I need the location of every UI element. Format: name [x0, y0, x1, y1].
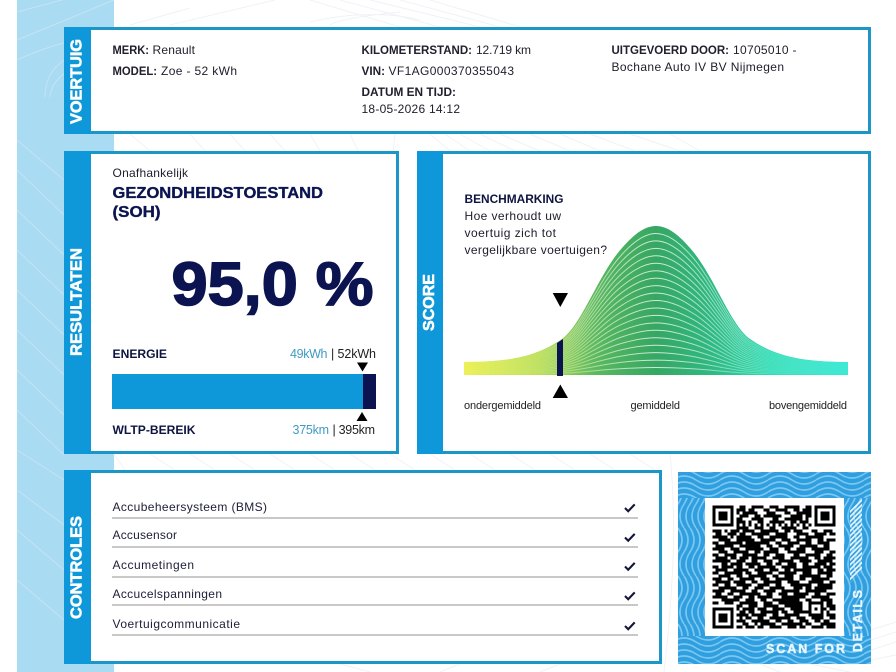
- text: benchmarking question: [464, 209, 607, 257]
- check row: voertuigcommunicatie: [112, 617, 638, 636]
- check row: accucelspanningen: Accucelspanningen: [112, 587, 222, 601]
- text: datum en tijd: DATUM EN TIJD:: [362, 87, 456, 99]
- qr code: [712, 506, 836, 628]
- check row: accusensor: [112, 528, 638, 548]
- text: benchmarking question: vergelijkbare voertuigen?: [464, 243, 607, 257]
- text: kilometerstand: [362, 43, 531, 57]
- values: energie: 49kWh: [290, 347, 328, 361]
- axis label: gemiddeld: gemiddeld: [630, 400, 680, 412]
- values: wltp-bereik: [292, 423, 375, 437]
- band label: resultaten: RESULTATEN: [68, 248, 85, 356]
- score value: 95,0 %: 95,0 %: [172, 250, 374, 318]
- band label: controles: CONTROLES: [68, 516, 85, 619]
- check row: accumetingen: [112, 558, 638, 578]
- heading: gezondheidstoestand: (SOH): [112, 204, 160, 221]
- text: benchmarking question: Hoe verhoudt uw: [464, 209, 561, 223]
- check row: accucelspanningen: [112, 587, 638, 606]
- text: kilometerstand: KILOMETERSTAND:: [362, 45, 472, 57]
- panel: controles: [64, 470, 660, 664]
- text: scan for: SCAN FOR: [766, 642, 845, 656]
- values: energie: | 52kWh: [331, 347, 376, 361]
- panel: qr code: [678, 472, 871, 664]
- decorative hatch strip: [850, 498, 862, 583]
- heading: benchmarking: BENCHMARKING: [464, 192, 564, 206]
- text: merk: MERK:: [112, 45, 149, 57]
- check row: accumetingen: Accumetingen: [112, 558, 194, 572]
- icon: marker down: [357, 362, 368, 372]
- text: datum en tijd: 18-05-2026 14:12: [362, 102, 460, 116]
- icon: marker up: [553, 384, 568, 398]
- text: uitgevoerd door: [612, 43, 796, 74]
- axis label: bovengemiddeld: bovengemiddeld: [769, 400, 847, 412]
- text: benchmarking question: voertuig zich tot: [464, 226, 557, 240]
- text: model: [112, 64, 237, 78]
- heading: gezondheidstoestand: [112, 185, 323, 221]
- vehicle position marker: [557, 339, 563, 376]
- check row: voertuigcommunicatie: Voertuigcommunicatie: [112, 617, 240, 631]
- text: model: Zoe - 52 kWh: [161, 64, 237, 78]
- capacity bar: [112, 374, 376, 409]
- chart: bell curve: [464, 226, 848, 375]
- panel: score: [417, 151, 870, 454]
- text: model: MODEL:: [112, 66, 157, 78]
- icon: marker down: [553, 293, 568, 307]
- text: details: DETAILS: [851, 590, 865, 652]
- band: controles: [64, 470, 91, 664]
- values: wltp-bereik: 375km: [292, 423, 329, 437]
- text: uitgevoerd door: 10705010 -: [733, 43, 796, 57]
- check row: accusensor: Accusensor: [112, 528, 177, 542]
- text: datum en tijd: [362, 87, 460, 116]
- axis label: ondergemiddeld: ondergemiddeld: [464, 400, 541, 412]
- label: energie: ENERGIE: [112, 347, 167, 361]
- text: kilometerstand: 12.719 km: [476, 43, 531, 57]
- band label: score: SCORE: [421, 274, 438, 331]
- check row: accubeheersysteem: Accubeheersysteem (BMS): [112, 500, 267, 514]
- band: resultaten: [64, 151, 91, 454]
- band: score: [417, 151, 443, 454]
- values: energie: [290, 347, 376, 361]
- background: pale blue strip: [17, 0, 114, 672]
- text: onafhankelijk: Onafhankelijk: [112, 166, 189, 180]
- check row: accubeheersysteem: [112, 500, 638, 519]
- label: wltp-bereik: WLTP-BEREIK: [112, 423, 196, 437]
- text: vin: VF1AG000370355043: [388, 64, 514, 78]
- text: uitgevoerd door: UITGEVOERD DOOR:: [612, 45, 729, 57]
- band label: voertuig: VOERTUIG: [68, 39, 85, 124]
- values: wltp-bereik: | 395km: [332, 423, 375, 437]
- text: vin: VIN:: [362, 66, 385, 78]
- panel: resultaten: [64, 151, 398, 454]
- text: merk: [112, 43, 196, 57]
- text: merk: Renault: [152, 43, 196, 57]
- band: voertuig: [64, 27, 91, 134]
- icon: marker up: [356, 412, 368, 421]
- heading: gezondheidstoestand: GEZONDHEIDSTOESTAND: [112, 185, 323, 202]
- panel: voertuig: [64, 27, 870, 134]
- text: uitgevoerd door: Bochane Auto IV BV Nijmegen: [612, 60, 784, 74]
